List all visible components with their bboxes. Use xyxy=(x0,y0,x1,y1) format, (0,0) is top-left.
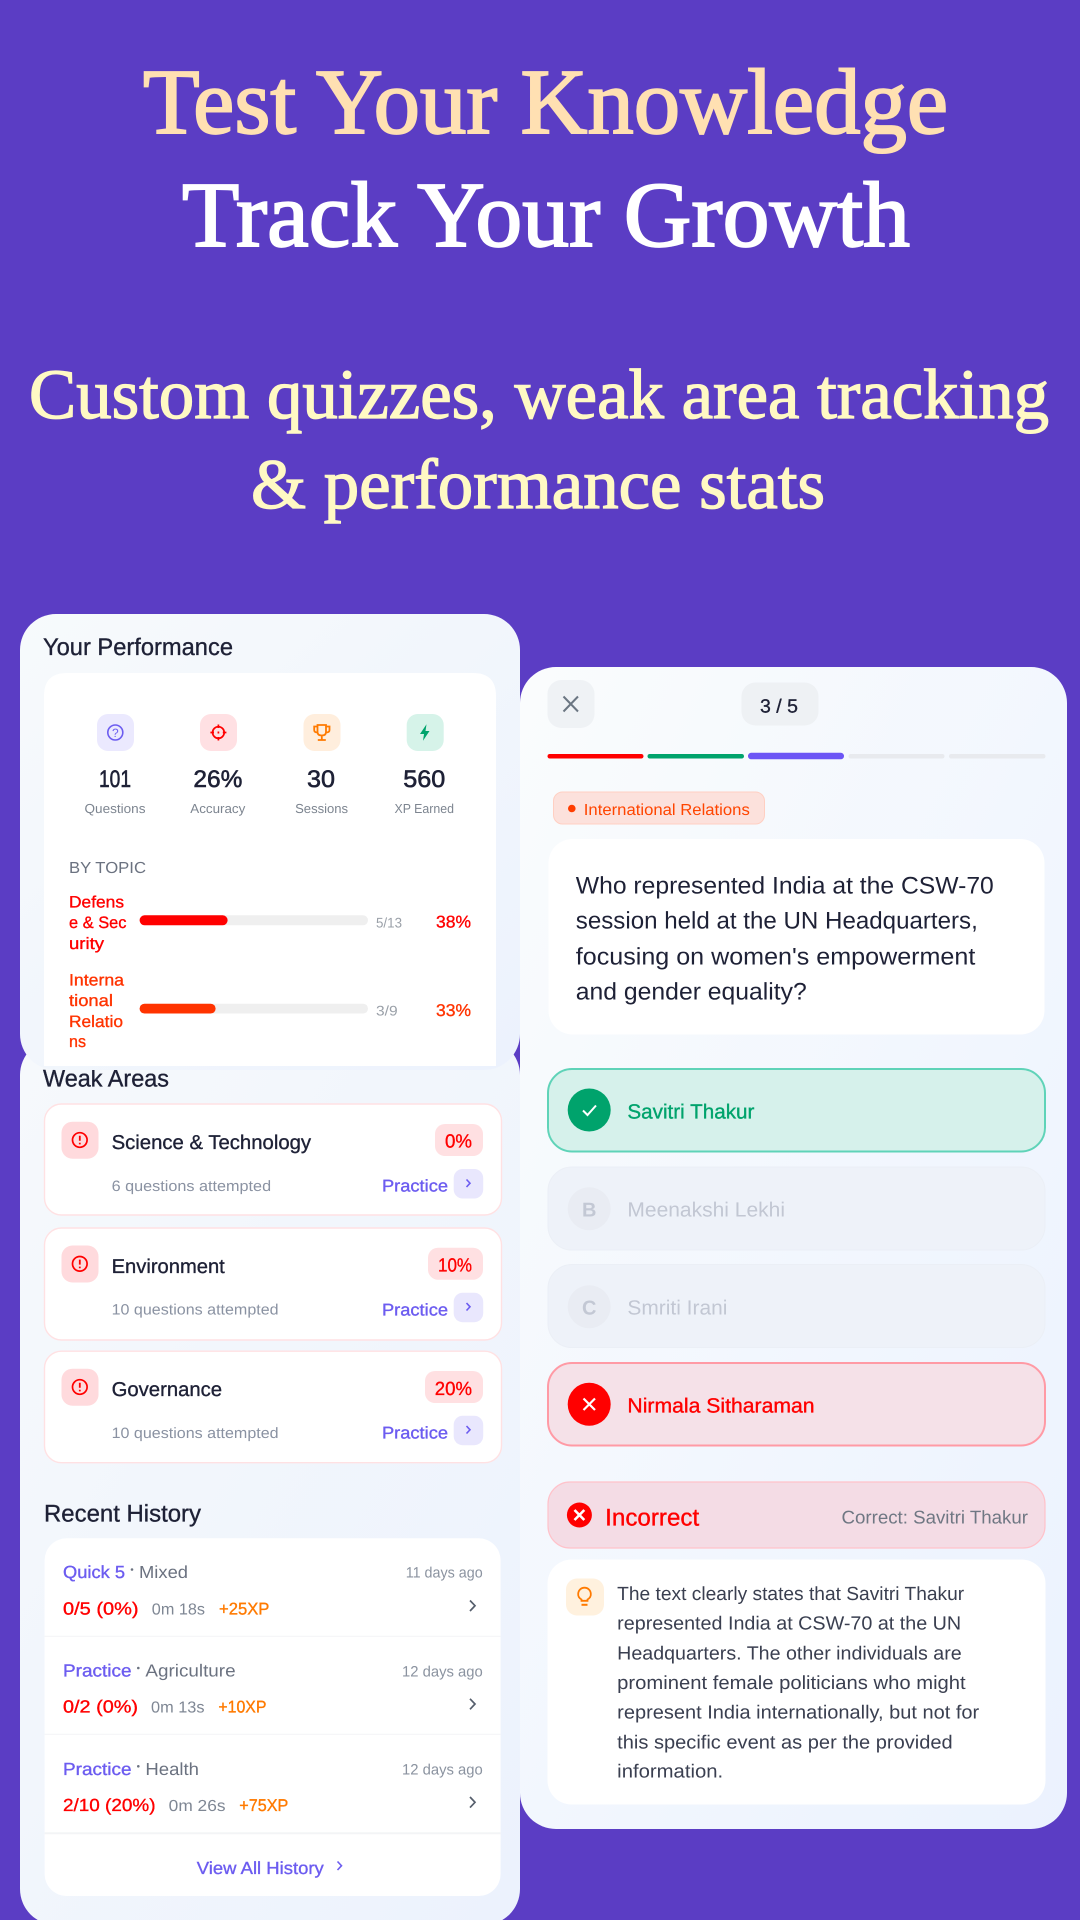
panel: your performance xyxy=(20,614,520,1070)
history row: practice health: Practice xyxy=(63,1759,132,1779)
explanation text xyxy=(617,1584,980,1783)
topic row: international relations: Interna xyxy=(69,972,125,990)
recent history card xyxy=(45,1538,501,1896)
stat: xp earned: XP Earned xyxy=(394,801,454,816)
topic row: defense and security xyxy=(69,894,471,953)
topic row: defense and security: 38% xyxy=(436,913,471,932)
weak area card: environment: Environment xyxy=(112,1256,225,1278)
weak area card: science and technology: 0% xyxy=(445,1132,472,1153)
stat: questions: ? xyxy=(112,726,119,740)
heading: by topic: BY TOPIC xyxy=(69,860,146,877)
explanation text: represent India internationally, but not for xyxy=(617,1703,980,1724)
history row: practice health: 0m 26s xyxy=(169,1798,226,1815)
stat: accuracy xyxy=(190,714,246,816)
result banner: Correct: Savitri Thakur xyxy=(842,1506,1028,1527)
panel: quiz question xyxy=(520,667,1067,1829)
option: correct answer: Savitri Thakur xyxy=(627,1100,755,1123)
topic row: international relations xyxy=(69,972,471,1051)
weak area card: governance: Governance xyxy=(112,1379,222,1401)
option: selected wrong answer xyxy=(548,1363,1045,1446)
subtitle xyxy=(29,356,1049,524)
topic row: defense and security: e & Sec xyxy=(69,914,126,932)
weak area card: governance: 10 questions attempted xyxy=(112,1425,279,1442)
history row: practice agriculture: Practice xyxy=(63,1661,132,1681)
topic row: international relations: 33% xyxy=(436,1001,471,1020)
history row: practice health xyxy=(63,1759,483,1815)
title line 1: Test Your Knowledge xyxy=(143,51,948,154)
option B: B xyxy=(582,1200,596,1222)
history row: quick 5: Quick 5 xyxy=(63,1562,125,1582)
explanation text: information. xyxy=(617,1762,723,1783)
question card: Who represented India at the CSW-70 xyxy=(576,872,994,899)
stat: sessions: Sessions xyxy=(295,801,349,816)
option C: C xyxy=(582,1297,596,1319)
option: correct answer xyxy=(548,1069,1045,1152)
history row: practice agriculture: 12 days ago xyxy=(402,1663,483,1680)
explanation text: Headquarters. The other individuals are xyxy=(617,1643,962,1664)
heading: recent history: Recent History xyxy=(44,1501,201,1528)
question card xyxy=(548,839,1044,1034)
weak area card: governance xyxy=(44,1351,502,1463)
stat: questions xyxy=(84,714,146,816)
topic row: international relations: 3/9 xyxy=(376,1003,398,1019)
weak area card: environment: Practice xyxy=(382,1300,448,1319)
heading: weak areas: Weak Areas xyxy=(43,1066,169,1093)
history row: practice health: +75XP xyxy=(239,1796,288,1815)
stat: sessions xyxy=(295,714,349,816)
explanation text: this specific event as per the provided xyxy=(617,1732,953,1753)
weak area card: environment: 10 questions attempted xyxy=(112,1302,279,1319)
topic tag: International Relations xyxy=(584,802,750,819)
panel: weak areas and recent history xyxy=(20,1039,520,1920)
option C xyxy=(548,1264,1045,1348)
history row: quick 5: +25XP xyxy=(219,1599,269,1618)
link: view all history: View All History xyxy=(197,1858,324,1878)
weak area card: governance: 20% xyxy=(435,1379,472,1400)
stat: accuracy: Accuracy xyxy=(190,801,246,816)
title line 2: Track Your Growth xyxy=(182,164,910,267)
topic row: defense and security: 5/13 xyxy=(376,915,402,931)
explanation text: prominent female politicians who might xyxy=(617,1673,966,1694)
history row: practice agriculture xyxy=(63,1661,483,1717)
option B xyxy=(548,1167,1045,1250)
history row: practice agriculture: 0/2 (0%) xyxy=(63,1697,138,1717)
stat: questions: Questions xyxy=(84,801,146,816)
weak area card: governance: Practice xyxy=(382,1424,448,1443)
history row: quick 5: 0/5 (0%) xyxy=(63,1598,139,1618)
stat: accuracy: 26% xyxy=(193,766,242,793)
weak area card: science and technology: Science & Technology xyxy=(112,1132,311,1154)
stat: xp earned xyxy=(394,714,454,816)
question card: focusing on women's empowerment xyxy=(576,943,976,970)
weak area card: science and technology xyxy=(44,1104,502,1215)
topic row: international relations: ns xyxy=(69,1033,86,1051)
question counter xyxy=(742,682,818,726)
history row: practice agriculture: Agriculture xyxy=(145,1661,236,1681)
icon: light bulb xyxy=(566,1578,604,1616)
question card: session held at the UN Headquarters, xyxy=(576,908,978,935)
history row: practice health: 2/10 (20%) xyxy=(63,1795,156,1815)
topic row: defense and security: Defens xyxy=(69,894,124,912)
title xyxy=(143,51,948,267)
option: selected wrong answer: Nirmala Sitharaman xyxy=(627,1394,815,1417)
heading: your performance: Your Performance xyxy=(43,634,233,661)
performance card xyxy=(44,673,496,1066)
explanation text: represented India at CSW-70 at the UN xyxy=(617,1614,961,1635)
weak area card: environment xyxy=(44,1228,502,1340)
history row: quick 5 xyxy=(63,1562,483,1618)
progress segments xyxy=(548,753,1046,759)
history row: quick 5: Mixed xyxy=(139,1562,188,1582)
history row: practice agriculture: 0m 13s xyxy=(151,1700,204,1717)
explanation text: The text clearly states that Savitri Thakur xyxy=(617,1584,965,1605)
history row: practice health: 12 days ago xyxy=(402,1762,483,1779)
result banner: Incorrect xyxy=(605,1505,700,1532)
history row: quick 5: 11 days ago xyxy=(406,1565,483,1582)
history row: quick 5: 0m 18s xyxy=(152,1601,205,1618)
subtitle line 2: & performance stats xyxy=(251,446,825,524)
question counter: 3 / 5 xyxy=(760,696,798,718)
weak area card: science and technology: 6 questions attempted xyxy=(112,1178,271,1195)
stat: xp earned: 560 xyxy=(403,766,445,793)
topic tag xyxy=(554,792,764,824)
subtitle line 1: Custom quizzes, weak area tracking xyxy=(29,356,1049,434)
weak area card: science and technology: Practice xyxy=(382,1177,448,1196)
weak area card: environment: 10% xyxy=(438,1255,472,1276)
history row: practice health: Health xyxy=(145,1759,199,1779)
topic row: international relations: Relatio xyxy=(69,1013,123,1031)
option B: Meenakshi Lekhi xyxy=(627,1199,785,1222)
result banner xyxy=(548,1482,1045,1548)
question card: and gender equality? xyxy=(576,978,807,1005)
close button xyxy=(548,680,594,728)
explanation card xyxy=(548,1560,1046,1804)
topic row: defense and security: urity xyxy=(69,935,105,953)
history row: practice agriculture: +10XP xyxy=(218,1698,266,1717)
stat: questions: 101 xyxy=(99,766,131,793)
stat: sessions: 30 xyxy=(307,766,335,793)
topic row: international relations: tional xyxy=(69,992,113,1010)
option C: Smriti Irani xyxy=(627,1296,727,1319)
